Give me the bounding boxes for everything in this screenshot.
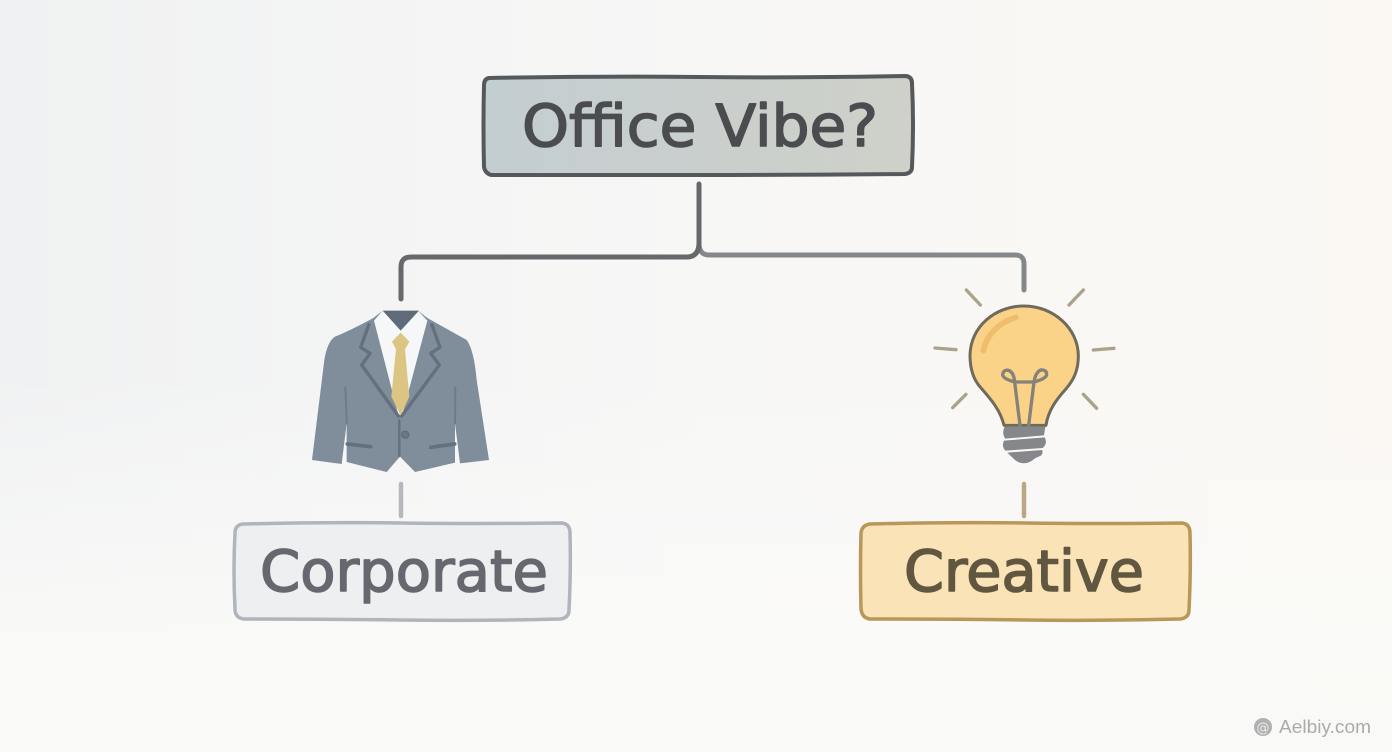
left lapel xyxy=(361,323,399,417)
shirt xyxy=(373,311,427,417)
icon: light bulb with rays xyxy=(935,290,1114,463)
option box: Creative xyxy=(860,523,1190,620)
heading box: Office Vibe?: Office Vibe? xyxy=(522,92,878,160)
watermark: Aelbiy.com xyxy=(1279,717,1371,737)
heading box: Office Vibe? xyxy=(484,76,913,175)
watermark: @ xyxy=(1256,721,1270,736)
icon: business suit with tie xyxy=(312,311,489,472)
jacket body and sleeves xyxy=(312,311,489,472)
option box: Corporate xyxy=(234,523,570,620)
screw base xyxy=(1003,427,1046,463)
option box: Creative: Creative xyxy=(904,539,1144,605)
connector: tree from question to both options xyxy=(401,184,1024,299)
rays xyxy=(935,290,1114,408)
tie xyxy=(391,333,409,415)
placket and sleeve seams xyxy=(345,387,455,456)
connector stem: bulb to Creative xyxy=(1022,484,1026,516)
collar neck xyxy=(383,311,419,331)
highlight xyxy=(983,317,1016,351)
right lapel xyxy=(401,323,440,417)
option box: Corporate: Corporate xyxy=(260,539,548,605)
connector stem: suit to Corporate xyxy=(399,484,403,516)
button xyxy=(402,431,409,438)
bulb glass xyxy=(970,306,1078,425)
filament xyxy=(1003,370,1047,425)
